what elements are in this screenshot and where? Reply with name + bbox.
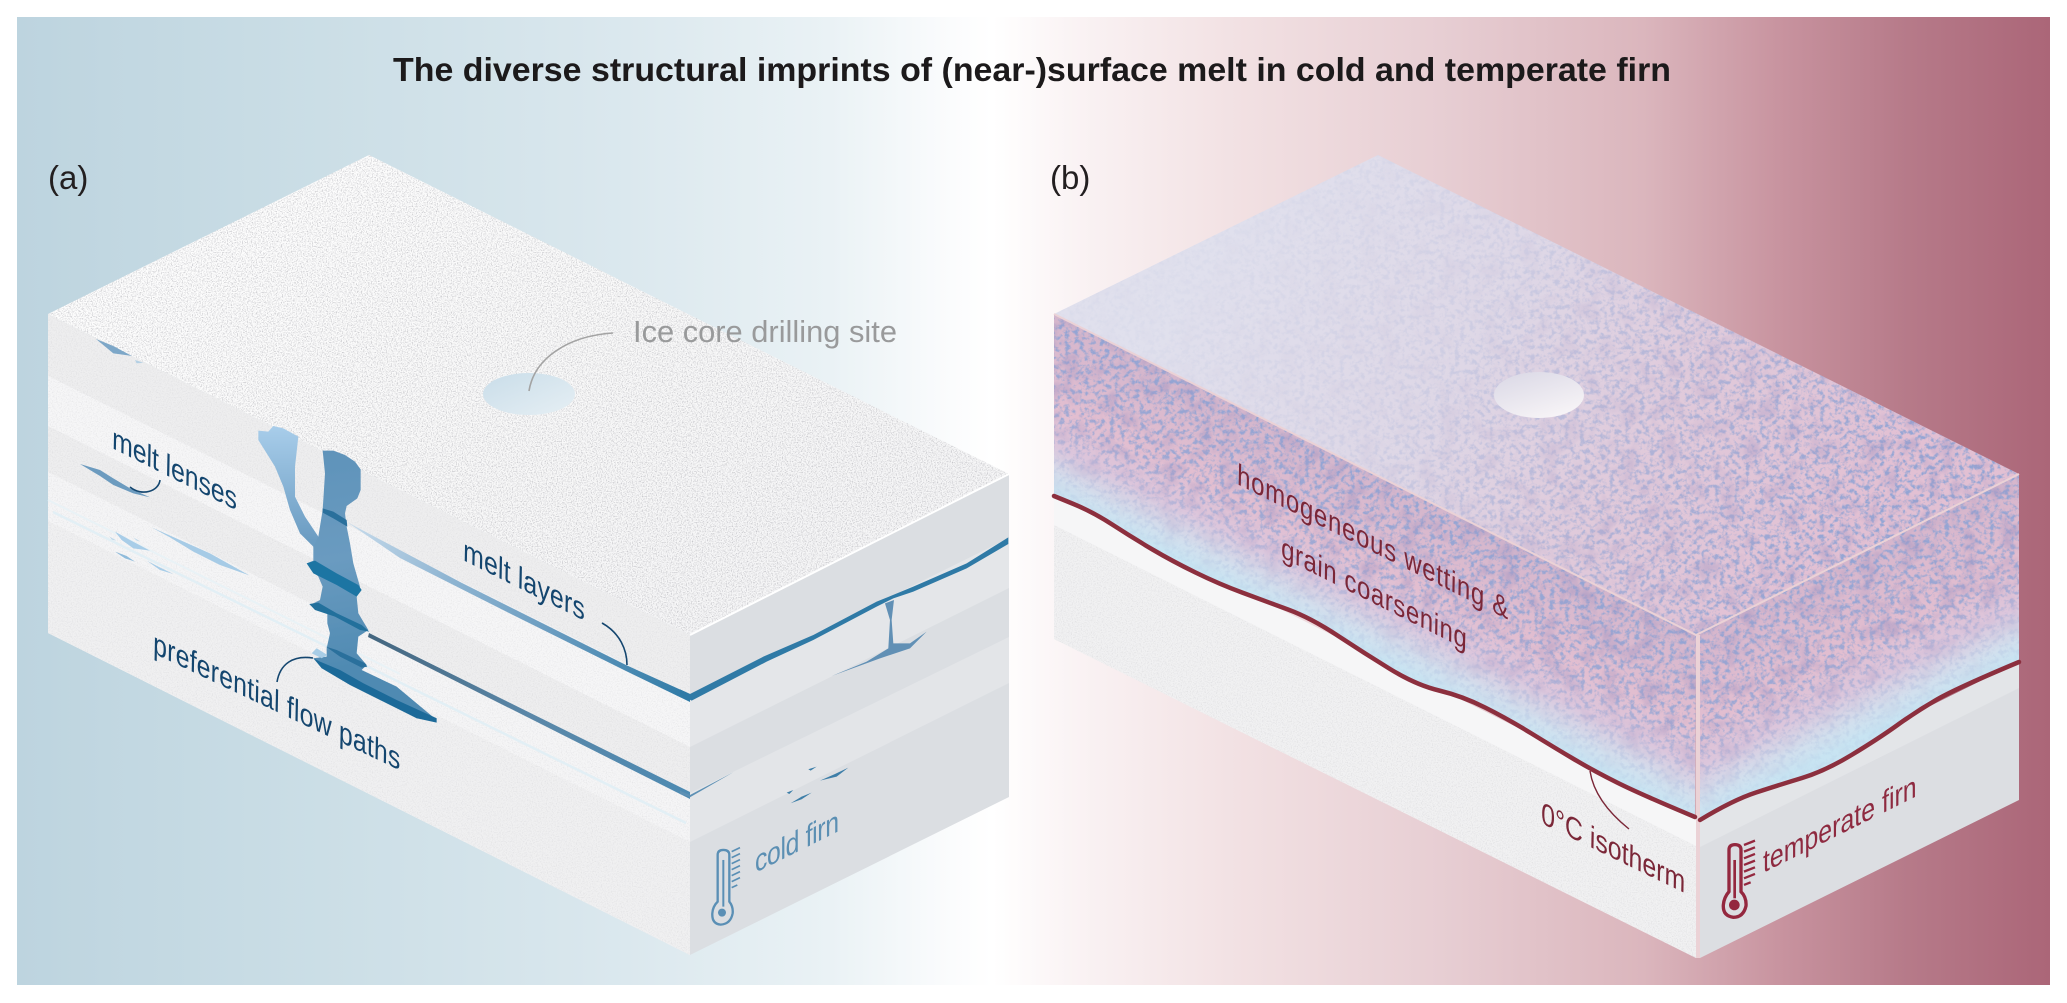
leader: melt lenses [130,480,160,492]
drilling site circle [1494,372,1584,418]
melt layers on left face [347,522,690,799]
preferential flow channel [258,426,437,723]
panel: cold firn block [48,155,1009,955]
panel: temperate firn block [1054,155,2019,958]
leader: isotherm [1590,771,1629,829]
leader: preferential flow paths [277,657,313,682]
panel label (a): (a) [48,159,88,196]
label: grain coarsening: grain coarsening [1281,531,1467,657]
wet firn, right face [1700,474,2019,820]
wet firn, left face [1054,314,1696,817]
label: temperate firn: temperate firn [1763,769,1917,880]
melt layer and drip on right face [680,537,1008,803]
label: melt lenses: melt lenses [112,421,237,518]
firn below isotherm, right face [1700,662,2019,958]
leader: melt layers [602,623,627,665]
melt lenses on left face [80,339,249,575]
label: preferential flow paths: preferential flow paths [153,625,401,778]
wet firn, top face [1054,155,2019,635]
label: melt layers: melt layers [463,533,585,628]
top face [48,155,1009,635]
block edges [1054,314,2019,958]
right face with firn layers [690,474,1009,955]
icon: thermometer temperate [1723,841,1755,917]
title: The diverse structural imprints of (near-)surface melt in cold and temperate firn [393,51,1671,88]
left face with firn layers [48,314,690,955]
label: homogeneous wetting: homogeneous wetting & [1237,458,1509,627]
0 degree isotherm line [1054,496,2019,820]
firn below isotherm, left face [1054,496,1696,958]
label: cold firn: cold firn [755,804,839,880]
panel label (b): (b) [1050,159,1090,196]
drilling site leader [529,333,613,391]
drilling site circle [483,373,575,415]
label: ice core drilling site: Ice core drilling site [633,314,897,349]
label: 0 degree isotherm: 0°C isotherm [1541,796,1686,901]
icon: thermometer cold [712,848,740,925]
